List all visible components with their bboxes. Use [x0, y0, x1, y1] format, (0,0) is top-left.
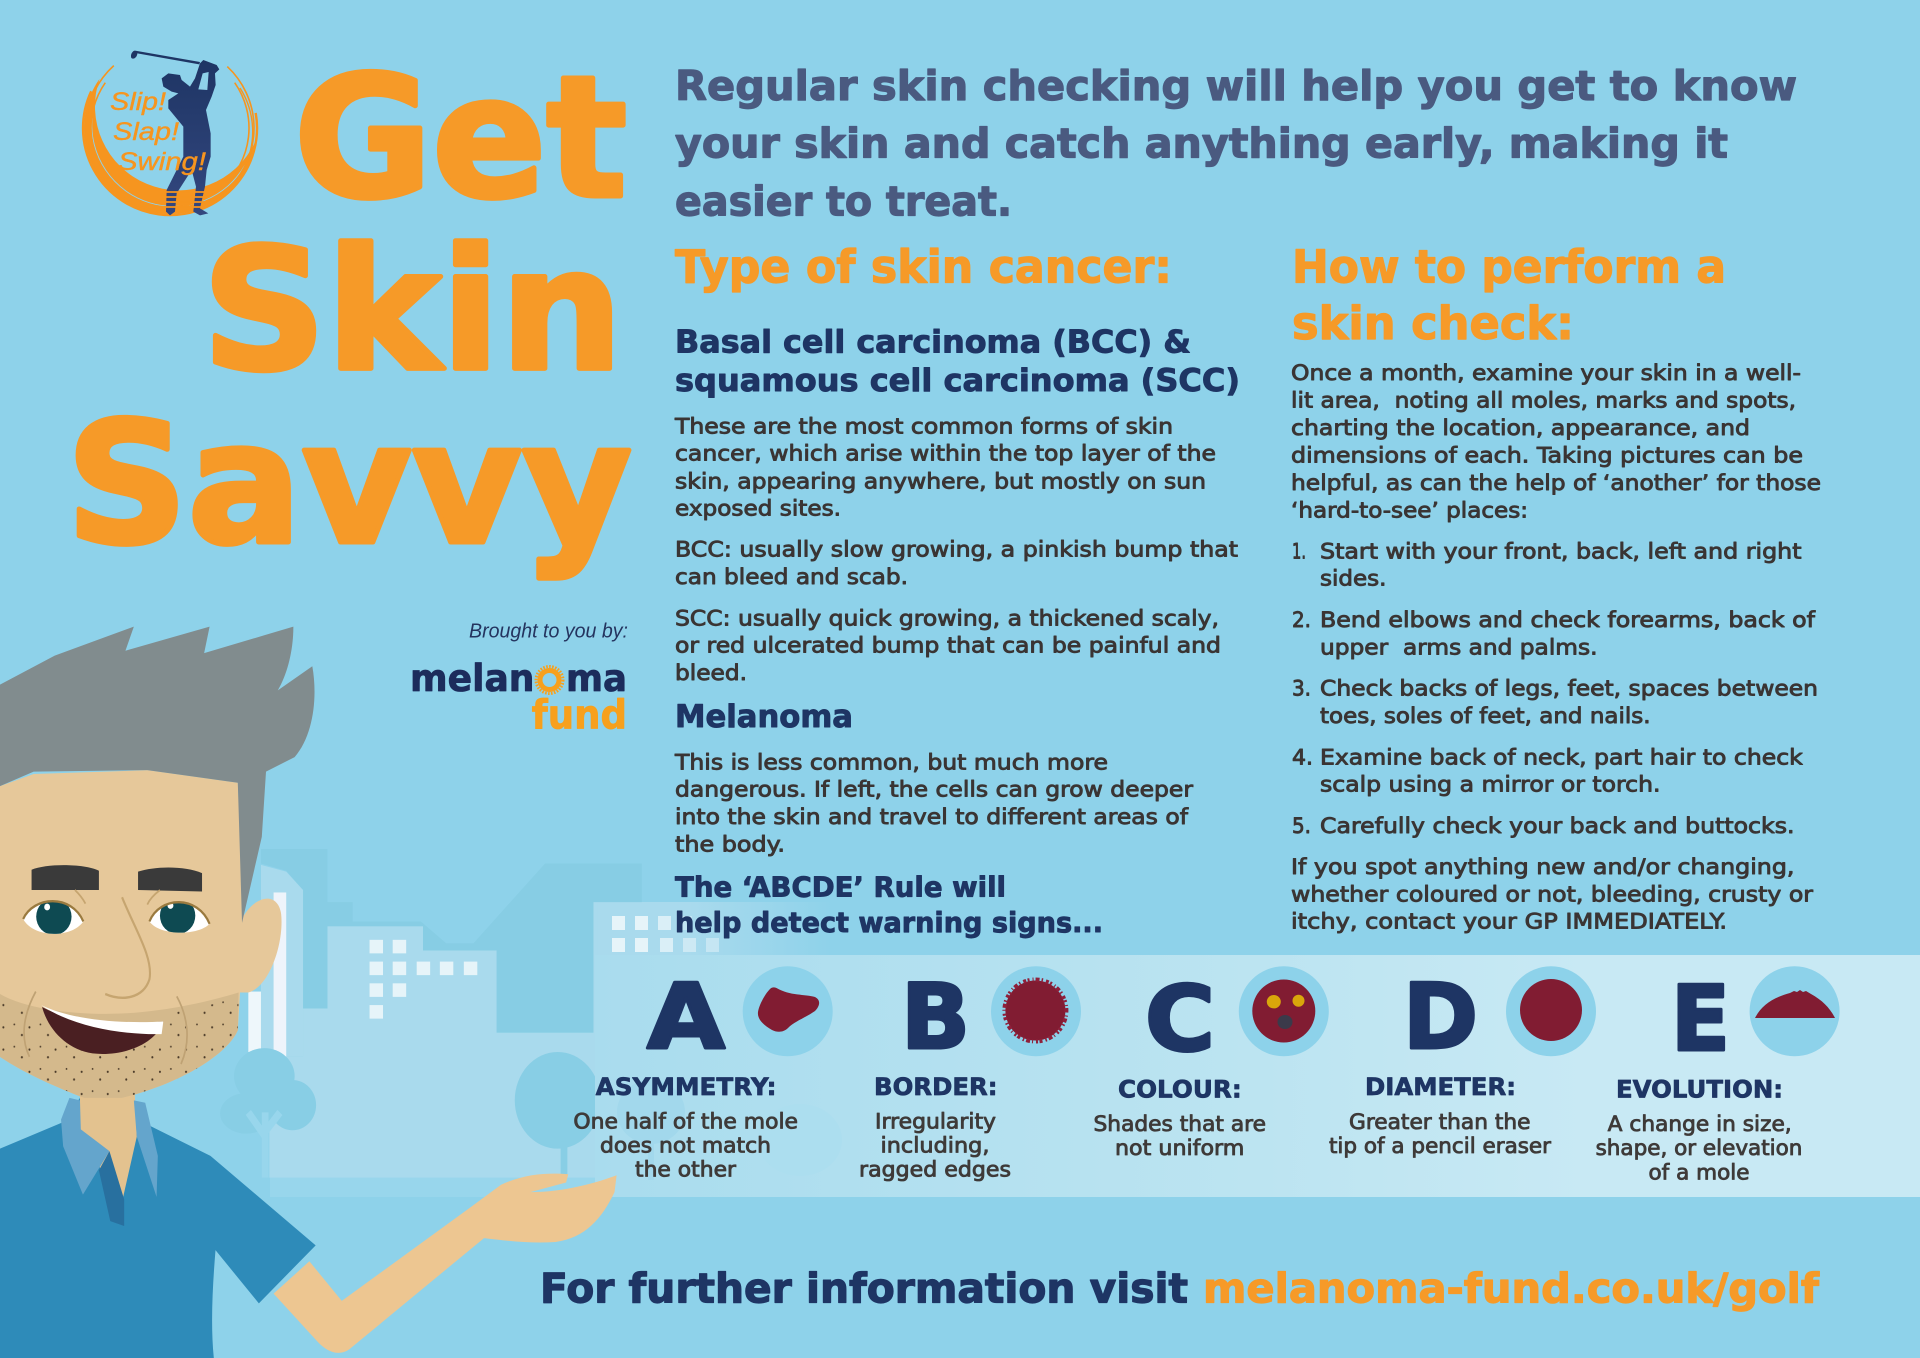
title: Savvy: [66, 386, 632, 582]
text: BCC: [675, 538, 1238, 590]
subheading: ABCDE rule: [675, 871, 1103, 939]
text: common forms: [674, 414, 1216, 522]
text: common forms: These are the most common forms of skin: [674, 414, 1173, 439]
icon: ragged border mole: [991, 966, 1081, 1056]
label: colour: Shades that are: [1094, 1112, 1266, 1136]
collar: [61, 1098, 158, 1197]
step 3: 3.: [1292, 677, 1311, 702]
text: contact your GP: whether coloured or not, bleeding, crusty or: [1291, 882, 1813, 907]
title: Skin: [202, 212, 623, 408]
subheading: ABCDE rule: The ‘ABCDE’ Rule will: [675, 871, 1006, 904]
logo text: Slip!: [110, 88, 166, 116]
label: diameter: DIAMETER:: [1365, 1073, 1516, 1101]
arm and hand: [274, 1174, 617, 1353]
E evolution: E: [1671, 967, 1730, 1072]
text: once a month: lit area, noting all moles, marks and spots,: [1291, 389, 1796, 414]
text: once a month: ‘hard-to-see’ places:: [1291, 498, 1528, 523]
step 3: Check backs of legs, feet, spaces between: [1320, 677, 1818, 702]
brush stripes over the feet: [163, 192, 205, 207]
heading: type of skin cancer: Type of skin cancer:: [675, 241, 1172, 294]
eyes: [23, 901, 210, 934]
label: evolution: shape, or elevation: [1596, 1136, 1802, 1160]
D diameter: [1329, 965, 1596, 1158]
step 4: 4.: [1292, 745, 1313, 770]
D diameter: D: [1403, 965, 1478, 1070]
label: border: Irregularity: [875, 1109, 996, 1133]
subheading: BCC and SCC: squamous cell carcinoma (SCC): [675, 363, 1240, 399]
heading: skin check: [1292, 241, 1726, 350]
label: border: BORDER:: [874, 1073, 998, 1101]
subheading: melanoma: Melanoma: [675, 699, 853, 735]
A asymmetry: A: [647, 965, 725, 1070]
label: colour: [1094, 1075, 1266, 1160]
teeth: [41, 1005, 163, 1034]
text: once a month: helpful, as can the help of ‘another’ for those: [1291, 471, 1821, 496]
intro statement: easier to treat.: [675, 178, 1012, 226]
nose: [105, 897, 150, 998]
title: [66, 40, 632, 582]
step 2: upper arms and palms.: [1320, 635, 1598, 660]
text: once a month: [1291, 361, 1821, 523]
text: contact your GP: If you spot anything new and/or changing,: [1291, 855, 1794, 880]
icon: multi-coloured mole: [1239, 966, 1329, 1056]
text: common forms: cancer, which arise within the top layer of the: [675, 442, 1216, 467]
heading: skin check: skin check:: [1292, 297, 1574, 350]
heading: skin check: How to perform a: [1292, 241, 1726, 294]
logo text: Slap!: [113, 118, 179, 146]
E evolution: [1596, 966, 1840, 1184]
city skyline backdrop: [248, 849, 833, 1197]
text: SCC: [675, 606, 1221, 686]
character: cartoon man: [0, 627, 617, 1358]
step 5: 5.: [1292, 814, 1311, 839]
text: SCC: or red ulcerated bump that can be painful and: [675, 634, 1221, 659]
shirt placket: [99, 1151, 124, 1226]
subheading: BCC and SCC: Basal cell carcinoma (BCC) &: [675, 325, 1191, 361]
golfer silhouette: [131, 51, 219, 215]
step 4: Examine back of neck, part hair to check: [1320, 745, 1803, 770]
panel: how to perform a skin check: [1291, 241, 1821, 935]
text: melanoma description: This is less common, but much more: [674, 750, 1108, 775]
eyebrows: [32, 865, 202, 891]
step 2: Bend elbows and check forearms, back of: [1320, 608, 1815, 633]
step 1: [1292, 539, 1802, 592]
icon: large mole: [1506, 966, 1596, 1056]
logo: melanoma fund: ma: [566, 657, 627, 700]
beard: [0, 993, 239, 1098]
text: melanoma description: into the skin and travel to different areas of: [675, 805, 1188, 830]
label: border: [859, 1073, 1011, 1182]
shirt: [0, 1098, 316, 1358]
brush ring: [83, 66, 257, 215]
text: contact your GP: [1291, 855, 1813, 935]
label: asymmetry: does not match: [600, 1133, 771, 1157]
cheek lines: [24, 992, 187, 1064]
text: melanoma description: the body.: [675, 832, 785, 857]
step 2: 2.: [1292, 608, 1311, 633]
icon: raised mole: [1750, 966, 1840, 1056]
step 2: [1292, 608, 1815, 660]
brought to you by credit: Brought to you by:: [469, 620, 628, 642]
label: diameter: tip of a pencil eraser: [1329, 1134, 1551, 1158]
text: SCC: SCC: usually quick growing, a thickened scaly,: [675, 606, 1219, 631]
ear: [238, 899, 282, 993]
mouth: [42, 1007, 163, 1054]
step 1: sides.: [1320, 567, 1386, 592]
label: asymmetry: [573, 1073, 798, 1182]
text: melanoma description: [674, 750, 1193, 857]
subheading: BCC and SCC: [675, 325, 1240, 399]
logo: melanoma fund: melan: [410, 657, 534, 700]
text: once a month: charting the location, appearance, and: [1291, 416, 1750, 441]
label: evolution: EVOLUTION:: [1616, 1075, 1783, 1103]
label: asymmetry: One half of the mole: [573, 1109, 798, 1133]
label: asymmetry: the other: [635, 1158, 736, 1182]
step 1: Start with your front, back, left and right: [1320, 539, 1802, 564]
B border: B: [901, 965, 970, 1070]
title: Get: [294, 40, 627, 236]
label: border: ragged edges: [859, 1158, 1011, 1182]
text: common forms: skin, appearing anywhere, but mostly on sun: [675, 469, 1206, 494]
logo: melanoma fund: [410, 657, 627, 738]
subheading: ABCDE rule: help detect warning signs...: [675, 906, 1103, 939]
trees: [220, 1048, 601, 1178]
B border: [859, 965, 1081, 1182]
text: once a month: Once a month, examine your skin in a well-: [1291, 361, 1801, 386]
text: SCC: bleed.: [675, 661, 747, 686]
label: border: including,: [880, 1133, 990, 1157]
label: asymmetry: ASYMMETRY:: [596, 1073, 776, 1101]
label: diameter: Greater than the: [1349, 1110, 1530, 1134]
panel: type of skin cancer: [674, 241, 1240, 939]
label: evolution: A change in size,: [1608, 1112, 1792, 1136]
C colour: C: [1145, 967, 1215, 1072]
footer call to action: For further information visit: [540, 1265, 1188, 1313]
ABCDE band: [595, 955, 1920, 1197]
stubble: [0, 996, 239, 1098]
text: BCC: can bleed and scab.: [675, 565, 908, 590]
A asymmetry: [573, 965, 833, 1182]
label: colour: not uniform: [1115, 1136, 1244, 1160]
text: common forms: exposed sites.: [675, 497, 841, 522]
logo text: [110, 88, 206, 176]
icon: asymmetric mole: [743, 966, 833, 1056]
label: evolution: [1596, 1075, 1802, 1184]
C colour: [1094, 966, 1329, 1160]
text: BCC: BCC: usually slow growing, a pinkish bump that: [675, 538, 1238, 563]
step 4: scalp using a mirror or torch.: [1320, 773, 1660, 798]
text: contact your GP: itchy, contact your GP IMMEDIATELY.: [1291, 910, 1727, 935]
text: once a month: dimensions of each. Taking pictures can be: [1291, 443, 1803, 468]
footer call to action: melanoma-fund.co.uk/golf: [1203, 1265, 1820, 1313]
text: melanoma description: dangerous. If left, the cells can grow deeper: [675, 778, 1193, 803]
step 4: [1292, 745, 1803, 798]
logo: Slip Slap Swing golfer: [83, 51, 257, 215]
step 3: [1292, 677, 1818, 729]
intro statement: [675, 62, 1797, 226]
hair: [0, 627, 315, 923]
step 3: toes, soles of feet, and nails.: [1320, 704, 1651, 729]
logo text: Swing!: [118, 148, 206, 176]
intro statement: your skin and catch anything early, making it: [675, 120, 1728, 168]
step 1: 1.: [1292, 539, 1306, 564]
label: colour: COLOUR:: [1118, 1075, 1242, 1103]
neck: [80, 1093, 137, 1202]
intro statement: Regular skin checking will help you get to know: [675, 62, 1797, 110]
footer call to action: [540, 1265, 1820, 1313]
label: evolution: of a mole: [1648, 1160, 1750, 1184]
step 5: Carefully check your back and buttocks.: [1320, 814, 1794, 839]
label: diameter: [1329, 1073, 1551, 1158]
face: [0, 770, 244, 1098]
logo: melanoma fund: fund: [532, 692, 627, 738]
